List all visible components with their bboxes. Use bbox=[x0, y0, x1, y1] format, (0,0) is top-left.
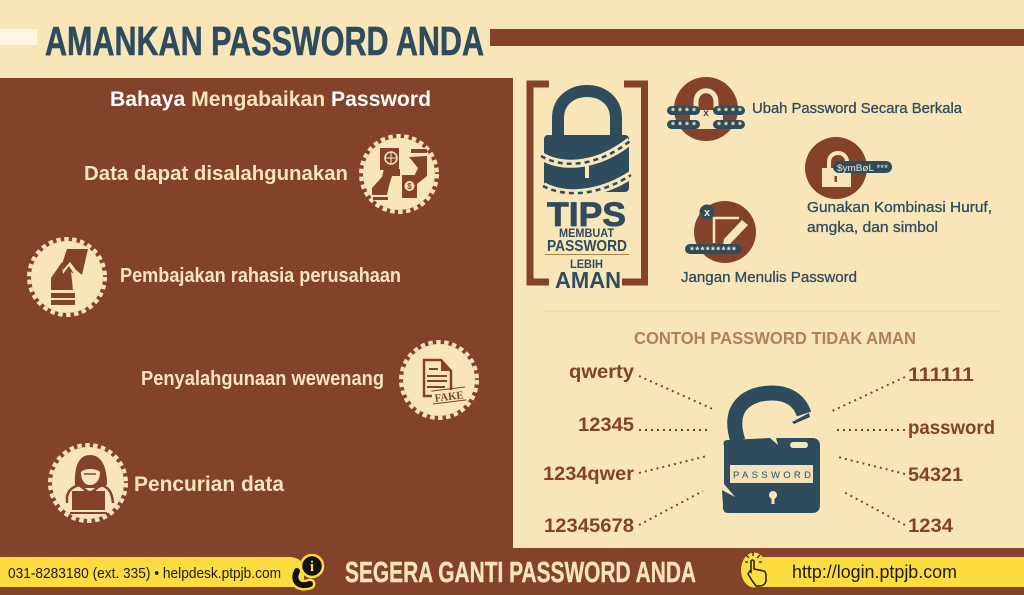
membuat password text bbox=[545, 226, 629, 293]
icon: lock with asterisk bars: x bbox=[703, 108, 709, 119]
tip text: amgka, dan simbol bbox=[807, 219, 938, 236]
footer bbox=[0, 548, 1024, 595]
password examples right bbox=[908, 365, 995, 537]
password examples left: 12345678 bbox=[544, 516, 634, 537]
dotted connectors bbox=[639, 376, 905, 525]
icon: pointing hand bbox=[741, 552, 767, 588]
item: pembajakan rahasia: Pembajakan rahasia perusahaan bbox=[120, 265, 401, 287]
password examples right: 1234 bbox=[908, 516, 953, 537]
item: penyalahgunaan wewenang: Penyalahgunaan wewenang bbox=[141, 368, 384, 390]
tips badge bbox=[530, 84, 644, 293]
contact bar: 031-8283180 (ext. 335) • helpdesk.ptpjb.com bbox=[8, 565, 281, 582]
tip: kombinasi huruf bbox=[805, 137, 992, 236]
membuat password text: AMAN bbox=[555, 267, 621, 293]
item: pencurian data: Pencurian data bbox=[134, 473, 284, 496]
icon: hacker with laptop bbox=[50, 445, 126, 521]
icon: broken padlock bbox=[722, 393, 820, 513]
login bar: http://login.ptpjb.com bbox=[792, 562, 957, 582]
password examples right: 111111 bbox=[908, 365, 974, 386]
icon: phone and info bbox=[295, 555, 323, 585]
tips text: TIPS bbox=[547, 196, 626, 234]
tip: ubah password bbox=[667, 77, 963, 141]
icon: broken padlock: PASSWORD bbox=[733, 470, 811, 481]
section heading: CONTOH PASSWORD TIDAK AMAN bbox=[634, 328, 916, 348]
password examples left: 1234qwer bbox=[543, 464, 635, 485]
contact bar bbox=[0, 557, 304, 587]
icon: pencil writing bbox=[685, 201, 756, 263]
tip: jangan menulis bbox=[681, 201, 857, 286]
icon: pencil writing: x bbox=[704, 207, 711, 219]
password examples right: password bbox=[908, 418, 995, 439]
icon: fake document: FAKE bbox=[434, 389, 464, 405]
icon: lock with asterisk bars: **** bbox=[716, 121, 743, 133]
icon: lock with symbol tag bbox=[805, 137, 892, 199]
footer call to action: SEGERA GANTI PASSWORD ANDA bbox=[345, 557, 696, 589]
title: AMANKAN PASSWORD ANDA bbox=[45, 18, 484, 64]
membuat password text: PASSWORD bbox=[547, 238, 627, 255]
icon: chained padlock bbox=[541, 91, 631, 193]
icon: lock with asterisk bars: **** bbox=[670, 121, 697, 133]
login bar bbox=[755, 557, 1024, 587]
icon: hand holding card bbox=[29, 239, 105, 315]
tip text bbox=[807, 199, 992, 236]
icon: fake document bbox=[401, 342, 477, 418]
panel heading: Bahaya Mengabaikan Password bbox=[110, 88, 431, 111]
item: data disalahgunakan: Data dapat disalahgunakan bbox=[84, 163, 348, 185]
tip text: Jangan Menulis Password bbox=[681, 269, 857, 286]
icon: lock with asterisk bars bbox=[667, 77, 745, 141]
icon: phone and info: i bbox=[310, 559, 314, 575]
membuat password text: LEBIH bbox=[570, 257, 603, 271]
password examples left: 12345 bbox=[578, 415, 634, 436]
password examples left: qwerty bbox=[569, 362, 634, 383]
panel: bahaya mengabaikan password bbox=[0, 78, 513, 548]
icon: lock with asterisk bars: **** bbox=[716, 107, 743, 119]
section: contoh password tidak aman bbox=[543, 328, 995, 537]
password examples left bbox=[543, 362, 635, 537]
tip text: Gunakan Kombinasi Huruf, bbox=[807, 199, 992, 216]
icon: pencil writing: ********* bbox=[689, 246, 737, 258]
header bbox=[0, 18, 1024, 64]
password examples right: 54321 bbox=[908, 465, 963, 486]
icon: hands exchanging card and money: $ bbox=[407, 182, 412, 191]
tip text: Ubah Password Secara Berkala bbox=[752, 100, 963, 117]
membuat password text: MEMBUAT bbox=[559, 226, 615, 240]
icon: lock with asterisk bars: **** bbox=[670, 107, 697, 119]
icon: hands exchanging card and money bbox=[361, 136, 437, 212]
icon: lock with symbol tag: $ymBøL *** bbox=[837, 163, 888, 174]
